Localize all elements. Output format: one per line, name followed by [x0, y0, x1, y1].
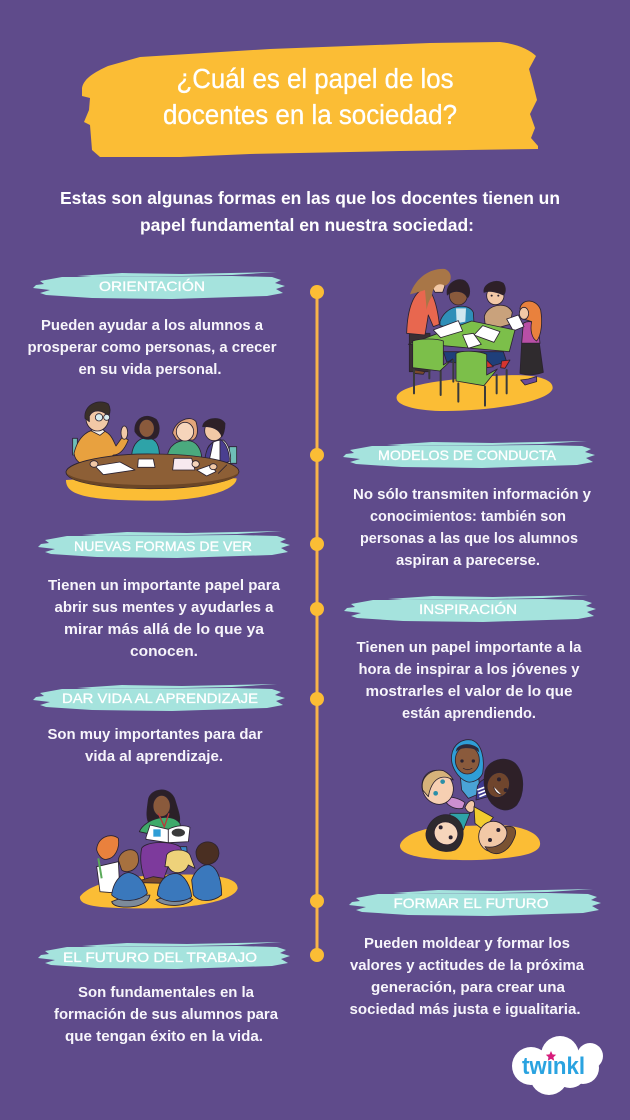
text: formar el futuro: valores y actitudes de la próxima [350, 957, 585, 974]
intro text: papel fundamental en nuestra sociedad: [140, 215, 474, 235]
title: ¿Cuál es el papel de los [176, 63, 454, 94]
illustration: teacher and pupils at green table [397, 269, 553, 411]
panel: nuevas formas de ver [38, 531, 290, 660]
text: nuevas formas de ver: abrir sus mentes y ayudarles a [54, 599, 274, 616]
heading: dar vida al aprendizaje: DAR VIDA AL APRENDIZAJE [62, 690, 258, 706]
text: modelos de conducta: conocimientos: también son [370, 508, 566, 525]
text: inspiración: mostrarles el valor de lo que [366, 683, 572, 700]
text: orientación: prosperar como personas, a crecer [28, 339, 277, 356]
heading: nuevas formas de ver [38, 531, 290, 558]
heading: modelos de conducta: MODELOS DE CONDUCTA [378, 447, 557, 463]
heading: dar vida al aprendizaje [33, 684, 285, 711]
text: inspiración: están aprendiendo. [402, 705, 536, 722]
text: nuevas formas de ver: mirar más allá de lo que ya [64, 621, 265, 638]
text: inspiración [356, 639, 582, 722]
heading: el futuro del trabajo [38, 942, 290, 969]
text: orientación: en su vida personal. [78, 361, 222, 378]
text: inspiración: hora de inspirar a los jóvenes y [358, 661, 580, 678]
text: dar vida al aprendizaje: vida al aprendizaje. [85, 748, 223, 765]
text: formar el futuro: sociedad más justa e igualitaria. [350, 1001, 580, 1018]
panel: dar vida al aprendizaje [33, 684, 285, 765]
illustration: teacher reading to seated pupils [80, 790, 238, 908]
text: orientación: Pueden ayudar a los alumnos a [41, 317, 264, 334]
text: el futuro del trabajo: que tengan éxito en la vida. [65, 1028, 263, 1045]
text: el futuro del trabajo: formación de sus alumnos para [54, 1006, 279, 1023]
logo: twinkl [512, 1036, 603, 1095]
text: orientación [28, 317, 277, 378]
panel: formar el futuro [349, 889, 601, 1018]
text: nuevas formas de ver: Tienen un importante papel para [48, 577, 281, 594]
heading: nuevas formas de ver: NUEVAS FORMAS DE VER [74, 538, 252, 554]
text: nuevas formas de ver: conocen. [130, 643, 198, 660]
heading: el futuro del trabajo: EL FUTURO DEL TRABAJO [63, 949, 257, 965]
panel: orientación [28, 272, 285, 378]
text: modelos de conducta: personas a las que los alumnos [360, 530, 578, 547]
text: formar el futuro: Pueden moldear y formar los [364, 935, 570, 952]
intro text: Estas son algunas formas en las que los docentes tienen un [60, 188, 560, 208]
panel: inspiración [344, 595, 596, 722]
text: formar el futuro [350, 935, 585, 1018]
text: el futuro del trabajo [54, 984, 279, 1045]
timeline [310, 285, 324, 962]
illustration: children with joined hands [400, 740, 540, 860]
heading: formar el futuro: FORMAR EL FUTURO [394, 895, 549, 911]
illustration: teacher and pupils at round table [66, 402, 239, 501]
text: el futuro del trabajo: Son fundamentales en la [78, 984, 255, 1001]
heading: modelos de conducta [343, 441, 595, 468]
heading: formar el futuro [349, 889, 601, 916]
heading: orientación: ORIENTACIÓN [99, 278, 205, 294]
intro text [60, 188, 560, 235]
heading: orientación [33, 272, 285, 299]
panel: modelos de conducta [343, 441, 595, 569]
heading: inspiración [344, 595, 596, 622]
text: nuevas formas de ver [48, 577, 281, 660]
text: modelos de conducta: No sólo transmiten información y [353, 486, 592, 503]
text: formar el futuro: generación, para crear una [371, 979, 566, 996]
text: dar vida al aprendizaje [48, 726, 263, 765]
heading: inspiración: INSPIRACIÓN [419, 601, 517, 617]
logo: twinkl: twinkl [522, 1053, 585, 1080]
panel: title banner [82, 42, 538, 157]
title [163, 63, 457, 130]
text: dar vida al aprendizaje: Son muy importantes para dar [48, 726, 263, 743]
text: modelos de conducta [353, 486, 592, 569]
text: modelos de conducta: aspiran a parecerse. [396, 552, 540, 569]
panel: el futuro del trabajo [38, 942, 290, 1045]
title: docentes en la sociedad? [163, 99, 457, 130]
text: inspiración: Tienen un papel importante a la [356, 639, 582, 656]
